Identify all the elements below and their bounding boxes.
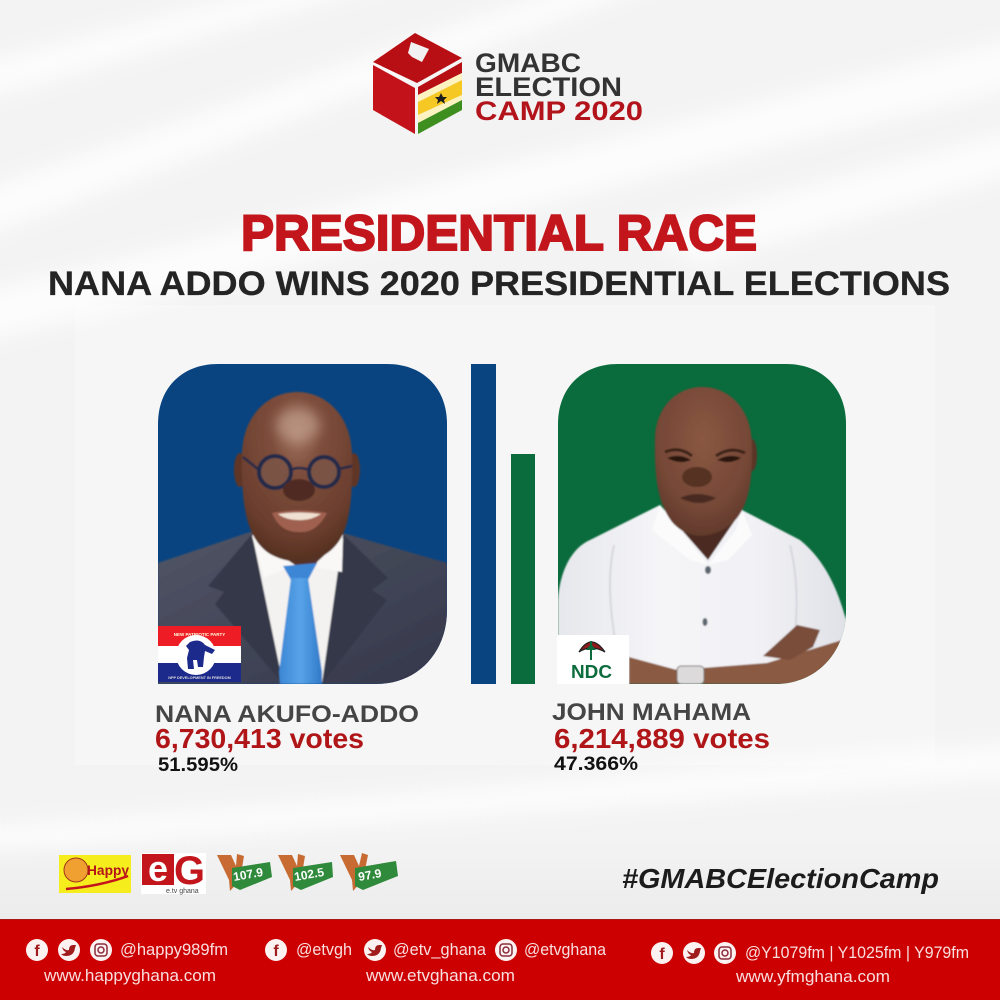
website: www.happyghana.com	[43, 967, 216, 985]
icon: facebook	[265, 939, 287, 961]
hashtag: #GMABCElectionCamp	[622, 863, 939, 894]
lapels	[208, 534, 283, 684]
head	[242, 392, 352, 562]
heading: Presidential Race: PRESIDENTIAL RACE	[241, 205, 757, 261]
logo: Y 102.5: 102.5	[293, 865, 325, 884]
shirt buttons	[702, 566, 711, 626]
neck	[288, 554, 326, 566]
icon: twitter	[364, 939, 386, 961]
broadcaster logos	[59, 848, 398, 895]
handle: @etv_ghana	[393, 941, 487, 959]
logo: Y 97.9: 97.9	[357, 866, 383, 884]
logo: Y 97.9	[340, 853, 398, 891]
icon: NPP party flag	[158, 626, 241, 682]
icon: instagram	[714, 942, 736, 964]
collar	[251, 536, 296, 566]
bar: Akufo-Addo vote share	[471, 364, 496, 684]
handle: @happy989fm	[120, 941, 228, 959]
arm	[629, 640, 846, 684]
eyes	[667, 456, 741, 462]
sleeve folds	[610, 545, 797, 640]
mouth	[680, 494, 716, 503]
footer band	[0, 919, 1000, 1000]
icon: facebook	[26, 939, 48, 961]
logo: e.tv Ghana: G	[174, 849, 205, 893]
candidate result: Mahama: 6,214,889 votes	[554, 723, 770, 754]
candidate result: Mahama: JOHN MAHAMA	[552, 699, 751, 726]
shirt	[251, 535, 343, 684]
candidate result: Akufo-Addo: 6,730,413 votes	[155, 723, 364, 754]
icon: NPP party flag: NEW PATRIOTIC PARTY	[174, 632, 225, 637]
ear	[750, 438, 758, 472]
wristwatch	[677, 666, 704, 684]
candidate result: Mahama	[552, 699, 770, 775]
logo: Happy FM	[59, 855, 131, 893]
logo: GMABC Election Camp 2020	[373, 33, 643, 134]
logo text: GMABC	[475, 48, 581, 78]
candidate result: Akufo-Addo: NANA AKUFO-ADDO	[155, 701, 419, 728]
forehead highlight	[276, 408, 320, 442]
icon: ballot box	[373, 33, 462, 134]
logo text	[475, 48, 643, 126]
logo: e.tv Ghana: e	[148, 848, 168, 889]
icon: instagram	[495, 939, 517, 961]
logo: e.tv Ghana: e.tv ghana	[166, 888, 199, 895]
ears	[234, 453, 246, 487]
logo text: CAMP 2020	[475, 96, 643, 126]
logo: e.tv Ghana	[141, 848, 206, 895]
nose	[283, 479, 315, 501]
icon: facebook	[651, 942, 673, 964]
logo: Y 107.9: 107.9	[232, 865, 264, 884]
icon: NDC party logo: NDC	[571, 662, 612, 682]
candidate result: Akufo-Addo	[155, 701, 419, 776]
footer: Happy FM socials	[26, 939, 228, 985]
icon: NPP party flag: NPP DEVELOPMENT IN FREEDOM	[168, 676, 231, 680]
hand	[763, 625, 820, 660]
icon: instagram	[90, 939, 112, 961]
glasses arms	[243, 457, 352, 470]
panel: Akufo-Addo portrait	[158, 364, 447, 684]
icon: facebook: f	[34, 943, 40, 960]
panel: Mahama portrait	[558, 364, 846, 684]
handle: @Y1079fm | Y1025fm | Y979fm	[745, 944, 969, 962]
mouth	[272, 510, 327, 532]
logo: Y 102.5	[278, 854, 333, 891]
tie	[283, 563, 317, 580]
brow line	[665, 450, 745, 456]
candidate result: Mahama: 47.366%	[554, 754, 638, 775]
shirt	[558, 505, 846, 684]
website: www.yfmghana.com	[735, 968, 890, 986]
logo: Y 107.9	[217, 854, 272, 891]
icon: facebook: f	[659, 946, 665, 963]
footer: Y FM socials	[651, 942, 969, 986]
icon: facebook: f	[273, 943, 279, 960]
logo text: ELECTION	[475, 72, 622, 102]
icon: twitter	[683, 942, 705, 964]
subheading: NANA ADDO WINS 2020 PRESIDENTIAL ELECTIONS	[48, 265, 950, 303]
icon: NDC party logo	[557, 635, 629, 684]
bar: Mahama vote share	[511, 454, 535, 684]
logo: Happy FM: Happy	[87, 862, 129, 878]
website: www.etvghana.com	[365, 967, 515, 985]
nose	[682, 467, 712, 487]
suit	[158, 532, 447, 684]
neck	[682, 521, 734, 560]
footer: e.tv socials	[265, 939, 607, 985]
glasses	[259, 456, 339, 488]
handle: @etvghana	[524, 941, 607, 959]
icon: twitter	[58, 939, 80, 961]
collar	[652, 505, 708, 565]
handle: @etvgh	[296, 941, 352, 959]
candidate result: Akufo-Addo: 51.595%	[158, 755, 238, 776]
head	[655, 387, 752, 536]
